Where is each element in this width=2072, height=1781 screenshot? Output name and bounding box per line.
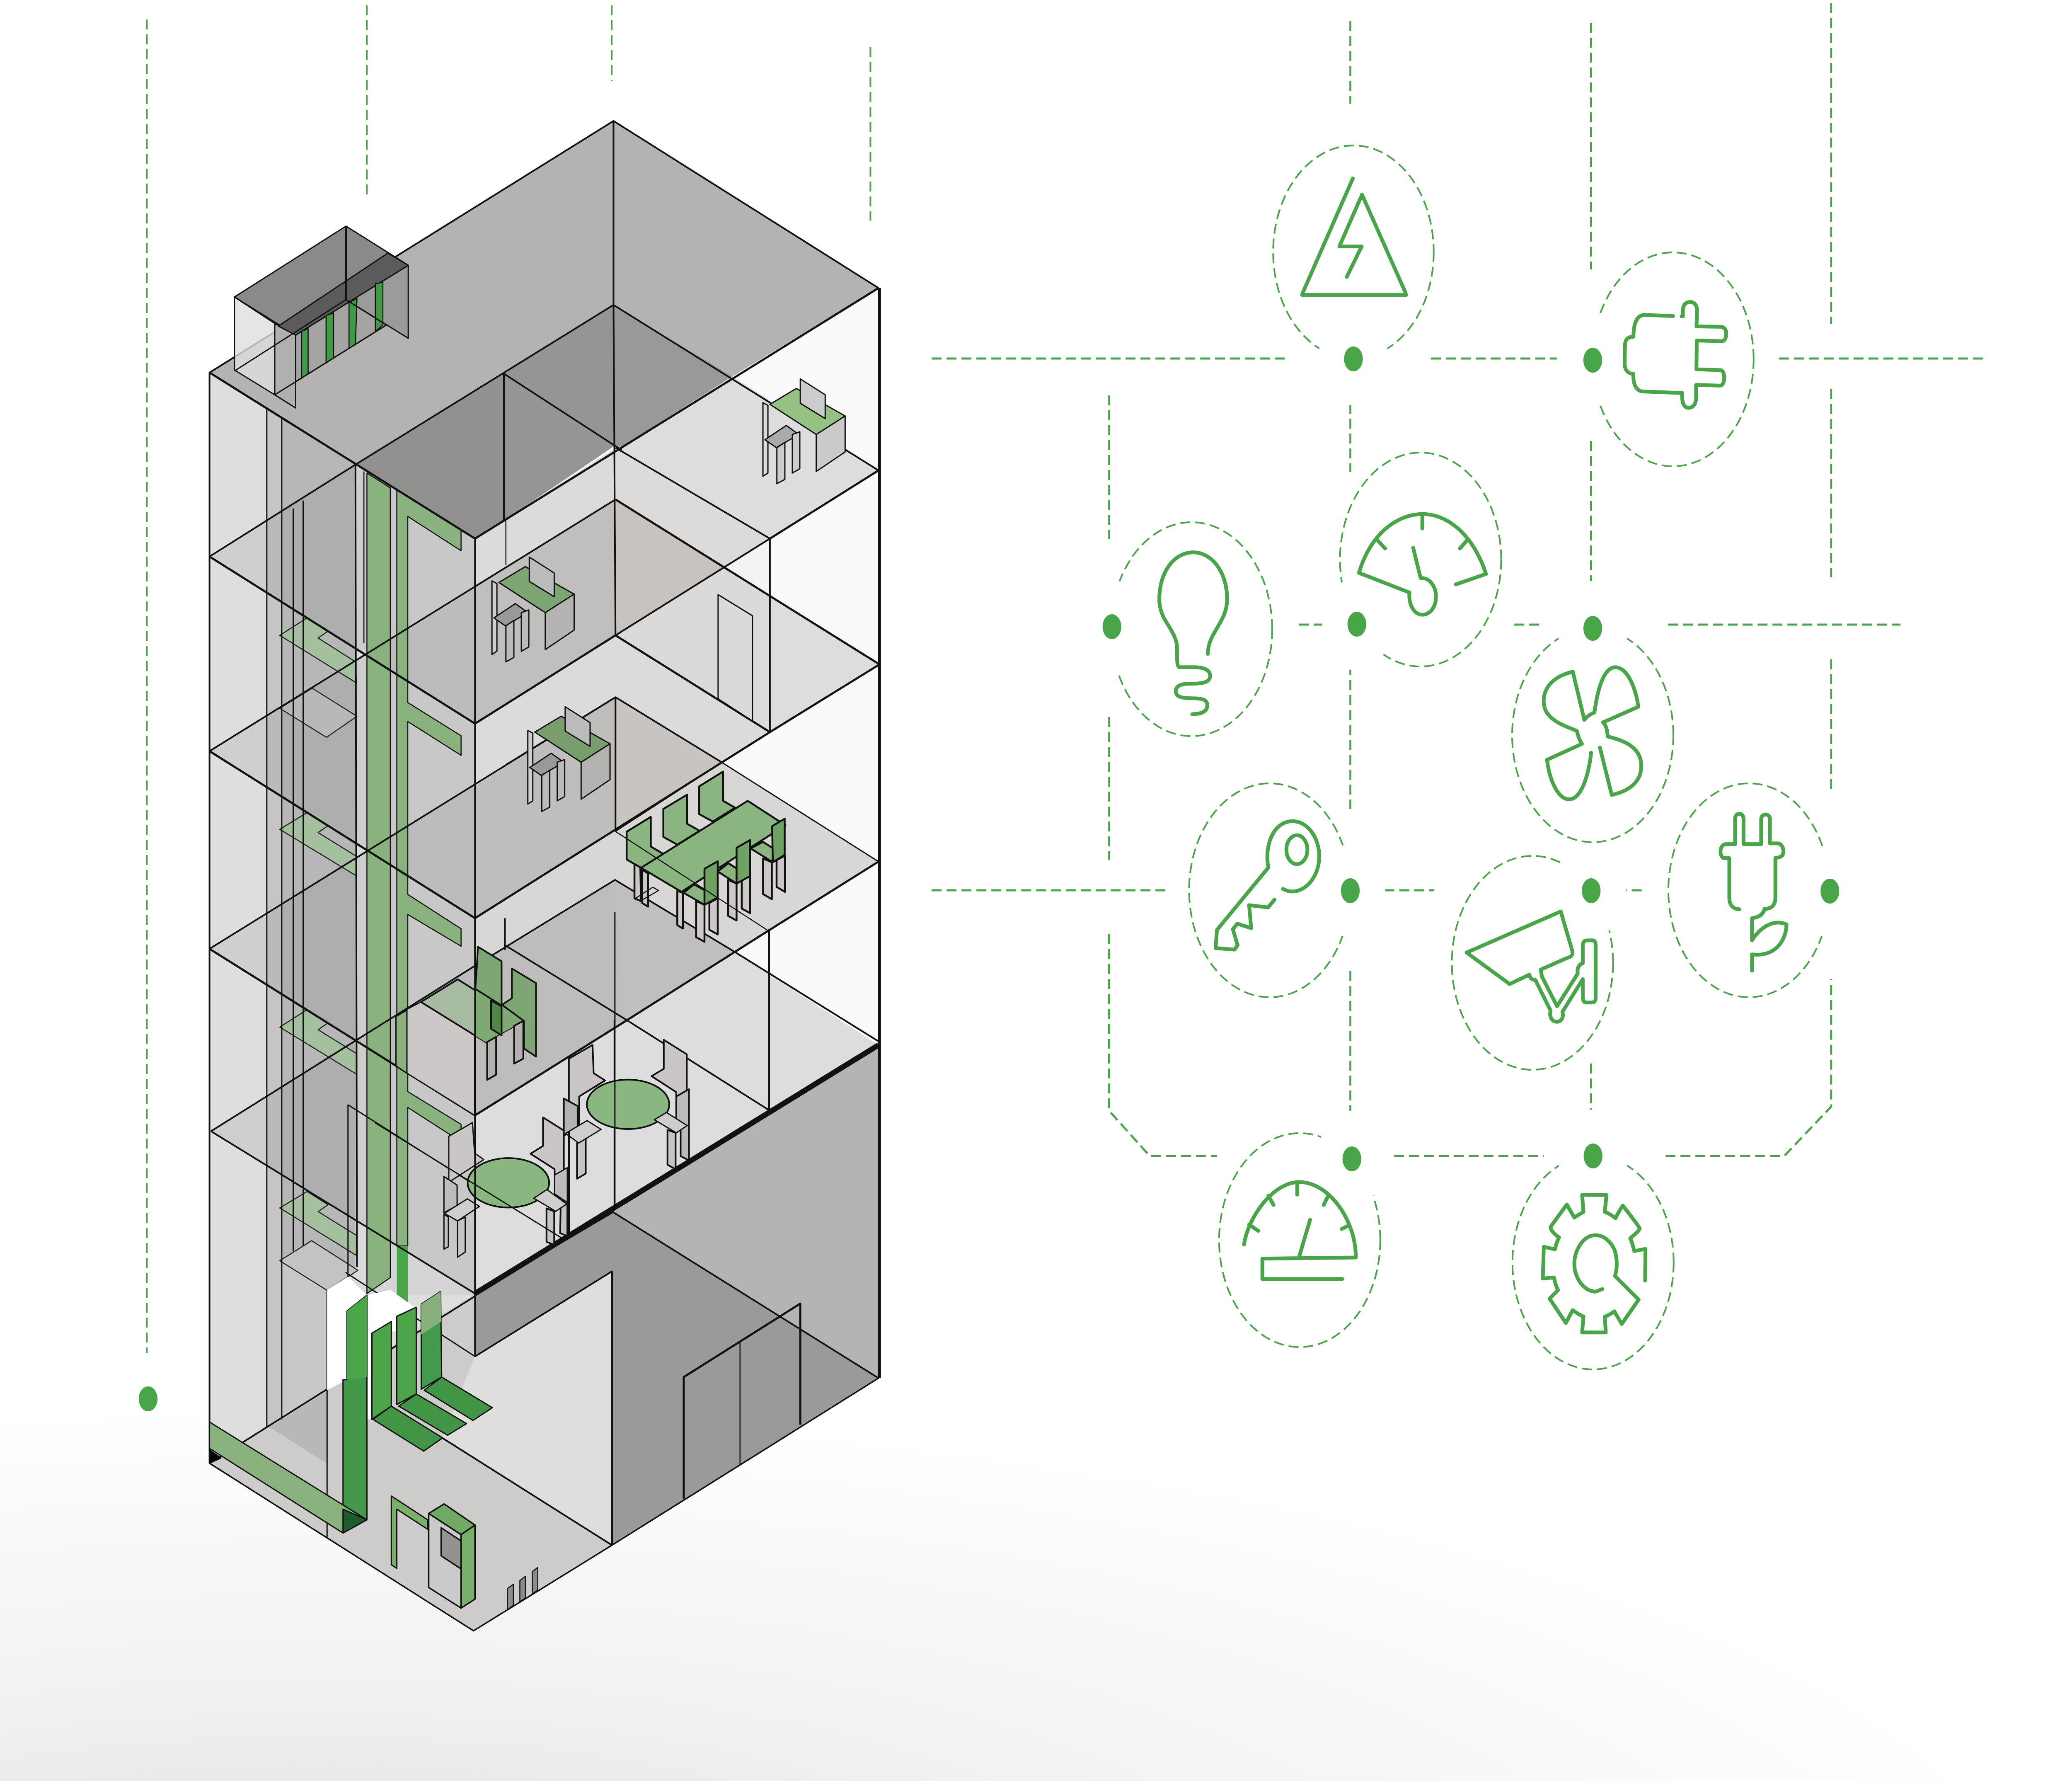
door	[718, 595, 753, 721]
right rooms	[475, 288, 879, 1295]
floor duct	[210, 1422, 367, 1533]
front chairs	[684, 819, 785, 905]
dashed icon rings	[1111, 145, 1830, 1369]
meeting table	[396, 947, 536, 1115]
horizontal row three	[932, 889, 1646, 891]
ceiling	[356, 305, 733, 538]
structure lines over tables	[375, 912, 615, 1294]
ground duct bracket	[391, 1496, 428, 1568]
shaft base	[270, 1390, 328, 1464]
icons	[1159, 178, 1786, 1333]
icon: key	[1215, 821, 1319, 950]
icon: eco plug	[1721, 814, 1786, 971]
icon: speedometer	[1244, 1182, 1356, 1279]
isometric building cutaway	[210, 121, 879, 1631]
electrical cabinet	[428, 1504, 475, 1608]
lobby floor	[442, 1271, 612, 1545]
round table left	[444, 1117, 567, 1257]
dining table	[615, 772, 785, 942]
table legs	[634, 856, 785, 942]
icon: gear	[1543, 1195, 1646, 1333]
connector network	[147, 3, 1987, 1353]
tall left leader	[146, 19, 148, 1353]
floor vents	[507, 1568, 538, 1610]
garage door	[684, 1304, 800, 1499]
structural lines	[210, 121, 879, 1631]
icon: sideways plug	[1624, 302, 1726, 408]
white shaft void	[327, 1277, 416, 1419]
basement and ground level	[210, 1045, 879, 1631]
ground floor plate	[210, 1294, 612, 1631]
horizontal row one	[932, 357, 1987, 360]
left wall	[210, 373, 475, 1631]
garage wall	[475, 1212, 879, 1545]
chair backs	[627, 772, 735, 868]
main riser	[343, 1295, 367, 1533]
lower risers	[210, 1277, 538, 1610]
riser two	[372, 1321, 443, 1451]
table top	[641, 801, 785, 892]
desk top floor	[763, 379, 845, 484]
table shadow frame	[635, 887, 658, 901]
roof slab	[210, 121, 879, 465]
connector dots	[139, 347, 1839, 1411]
corner shadow	[210, 1450, 221, 1463]
desk fourth floor	[528, 707, 610, 812]
horizontal row four and corner brackets	[1109, 934, 1831, 1156]
icon: power gauge	[1359, 514, 1486, 615]
icon: ventilation fan	[1544, 667, 1641, 800]
round table right	[564, 1040, 689, 1179]
horizontal row two	[1299, 623, 1900, 626]
rooftop plant box	[235, 226, 408, 408]
meeting and round tables	[375, 912, 689, 1294]
leaders above building	[367, 5, 870, 221]
icon: high voltage triangle	[1302, 178, 1406, 295]
vertical lines	[1109, 3, 1831, 1114]
green riser and branches	[367, 473, 461, 1320]
floor edge over table	[615, 831, 768, 931]
floor shadow	[0, 1368, 2072, 1781]
riser three	[397, 1307, 467, 1435]
riser four	[421, 1292, 492, 1420]
icon: light bulb	[1159, 552, 1227, 714]
landing slabs	[280, 688, 358, 1290]
ring gaps	[1077, 313, 1865, 1205]
desk third floor	[492, 557, 574, 662]
icon: security camera	[1467, 911, 1595, 1022]
duct corner	[343, 1509, 367, 1533]
small green ducts	[280, 618, 356, 1255]
back wall	[613, 1045, 879, 1378]
